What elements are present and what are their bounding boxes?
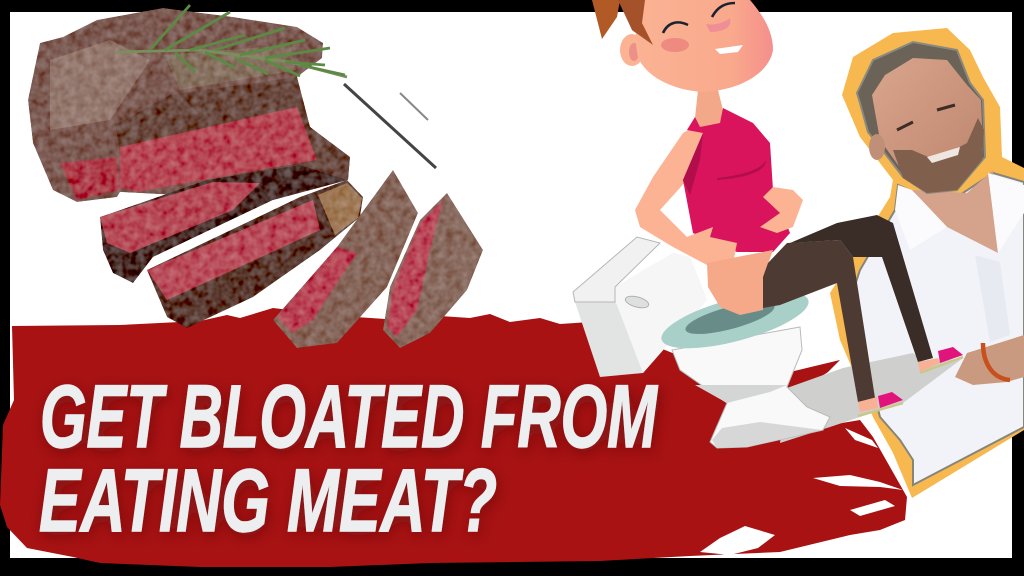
headline [39, 366, 658, 550]
cartoon: woman [592, 0, 963, 416]
headline line one: GET BLOATED FROM [40, 366, 658, 466]
headline line two: EATING MEAT? [39, 450, 497, 550]
left arm [635, 127, 737, 265]
flush button [624, 294, 650, 310]
presenter cutout with orange outline [830, 28, 1024, 498]
cartoon: floor shadow [780, 353, 963, 443]
cheek [661, 38, 689, 52]
hair strand over forehead [628, 0, 653, 45]
far foot [918, 358, 940, 372]
forearm [955, 335, 1024, 385]
neck [912, 170, 998, 253]
face [872, 58, 983, 188]
eyes [897, 105, 955, 130]
hair strands [592, 0, 620, 39]
teeth [715, 45, 743, 54]
steak: middle slice [100, 165, 347, 283]
smile [927, 147, 960, 163]
white shirt [850, 173, 1024, 485]
beard [893, 118, 984, 193]
tank lid [573, 237, 660, 302]
head outline [857, 42, 985, 193]
nose and tongue [706, 18, 730, 32]
ear [620, 34, 644, 66]
ear [869, 134, 885, 160]
head [636, 0, 773, 92]
steak: top cut red interior [120, 107, 317, 192]
steak: wedge two [383, 193, 483, 348]
eyes [663, 3, 735, 33]
steak [28, 8, 483, 348]
steak: top cut crust [28, 8, 350, 202]
hand on belly left [687, 227, 737, 265]
near leg [763, 240, 875, 402]
bracelet [983, 343, 1010, 380]
collar [895, 185, 947, 250]
neck and chest [695, 90, 723, 128]
cartoon: toilet [573, 237, 830, 448]
bowl [672, 327, 830, 448]
right arm [760, 187, 803, 233]
tank body [575, 253, 707, 377]
dress [683, 108, 790, 252]
steak: wedge one [273, 170, 418, 348]
steak: lower slice [147, 180, 363, 328]
rosemary sprig [117, 5, 347, 77]
seat [656, 280, 814, 360]
orange outline [830, 28, 1024, 498]
near foot [858, 397, 878, 412]
red brush stroke banner [0, 308, 907, 567]
far leg [790, 215, 933, 362]
rosemary stem and shard [344, 84, 436, 168]
hips [707, 250, 773, 315]
